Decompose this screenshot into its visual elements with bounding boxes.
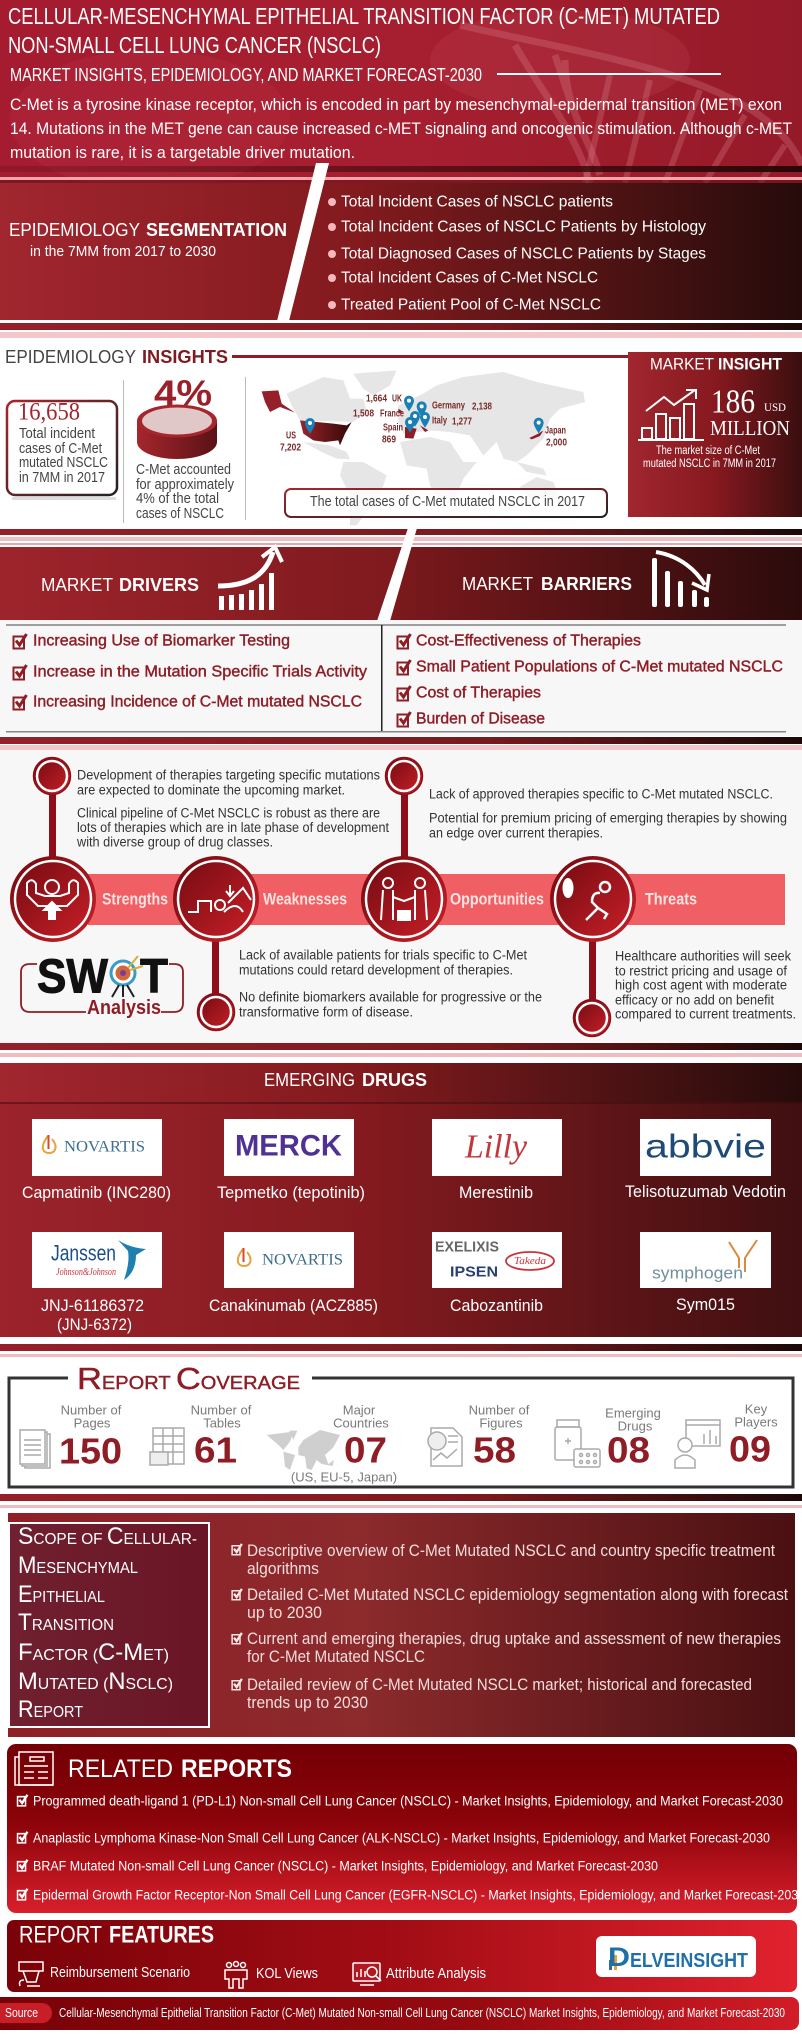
heading: report features: FEATURES: [109, 1922, 214, 1948]
stat: pages: Number of: [61, 1402, 122, 1418]
world map with case counts: France: [380, 408, 404, 420]
scope list: [232, 1542, 788, 1712]
icon: rising bars: [218, 547, 282, 610]
stat: figures: Number of: [469, 1402, 530, 1418]
stat: major countries: [267, 1402, 397, 1484]
segmentation list: Total Incident Cases of NSCLC Patients by Histology: [341, 218, 706, 236]
drug: Merestinib: Lilly: [464, 1128, 528, 1166]
panel: market drivers: [0, 547, 400, 620]
stat: figures: Figures: [479, 1416, 523, 1430]
stat: 4% cylinder: 4%: [154, 372, 212, 414]
heading: related reports: REPORTS: [181, 1755, 292, 1783]
threats node: Threats: [645, 890, 697, 908]
stat: tables: Number of: [191, 1402, 252, 1418]
feature: reimbursement scenario: [19, 1962, 190, 1986]
panel: scope of report: [8, 1513, 795, 1737]
heading: report coverage: REPORT COVERAGE: [77, 1361, 300, 1396]
weaknesses text: mutations could retard development of therapies.: [239, 962, 513, 978]
related reports list: [18, 1794, 802, 1902]
stat card: 16,658: cases of C-Met: [19, 441, 102, 457]
barriers list: Cost-Effectiveness of Therapies: [416, 632, 641, 650]
icon: growth chart: [638, 390, 704, 440]
strengths text: are expected to dominate the upcoming market.: [77, 782, 345, 798]
heading: epidemiology segmentation: EPIDEMIOLOGY: [9, 220, 140, 240]
title: NON-SMALL CELL LUNG CANCER (NSCLC): [8, 32, 381, 58]
stat: tables: Tables: [203, 1416, 241, 1430]
logo: DelveInsight: D: [608, 1942, 630, 1972]
strengths text: lots of therapies which are in late phase of development: [77, 820, 389, 835]
intro text block: [10, 96, 792, 162]
stat: major countries: 07: [344, 1430, 387, 1470]
weaknesses node: Weaknesses: [263, 890, 347, 908]
stat: key players: [675, 1402, 778, 1470]
drug: Cabozantinib: Cabozantinib: [450, 1297, 543, 1315]
opportunities text: Potential for premium pricing of emerging therapies by showing: [429, 810, 787, 826]
drug: Capmatinib: Capmatinib (INC280): [22, 1184, 171, 1202]
panel: market drivers: DRIVERS: [119, 575, 199, 595]
strengths node: Strengths: [102, 890, 168, 908]
strengths text: Development of therapies targeting specific mutations: [77, 768, 380, 782]
intro text block: mutation is rare, it is a targetable driver mutation.: [10, 144, 355, 162]
heading: emerging drugs: EMERGING: [264, 1070, 355, 1090]
feature: attribute analysis: [353, 1963, 486, 1985]
stat: key players: Players: [734, 1414, 778, 1430]
segmentation list: [328, 194, 706, 314]
SWOT analysis logo: T: [140, 950, 168, 1004]
panel: epidemiology insights: [5, 347, 632, 525]
world map with case counts: 1,664: [366, 394, 387, 404]
stat card: 16,658: 16,658: [18, 398, 80, 426]
scope list: up to 2030: [247, 1604, 322, 1622]
subtitle: MARKET INSIGHTS, EPIDEMIOLOGY, AND MARKET FORECAST-2030: [10, 65, 482, 85]
stat: major countries: Major: [343, 1402, 376, 1418]
scope list: Detailed review of C-Met Mutated NSCLC market; historical and forecasted: [247, 1676, 752, 1694]
drug: Tepmetko: [217, 1119, 365, 1202]
feature: attribute analysis: Attribute Analysis: [386, 1966, 486, 1982]
panel: market drivers: MARKET: [41, 575, 113, 595]
stat: pages: [20, 1402, 122, 1472]
drug: JNJ-61186372: JNJ-61186372: [41, 1297, 144, 1315]
segmentation list: Total Incident Cases of NSCLC patients: [341, 194, 613, 210]
drug: Cabozantinib: IPSEN: [450, 1264, 498, 1280]
drug: Cabozantinib: [432, 1232, 562, 1315]
world map with case counts: Italy: [432, 416, 447, 426]
segmentation list: Total Diagnosed Cases of NSCLC Patients by Stages: [341, 246, 706, 262]
panel: market insight: MILLION: [710, 416, 790, 440]
heading: emerging drugs: DRUGS: [362, 1070, 427, 1090]
drug: Canakinumab: NOVARTIS: [262, 1252, 343, 1268]
scope list: algorithms: [247, 1560, 319, 1578]
strengths text: with diverse group of drug classes.: [76, 834, 273, 850]
stat: pages: Pages: [74, 1416, 111, 1430]
threats node: [550, 856, 697, 942]
drug: Telisotuzumab Vedotin: [625, 1119, 786, 1201]
world map with case counts: UK: [392, 394, 403, 404]
world map with case counts: Germany: [432, 400, 465, 412]
drug: Merestinib: Merestinib: [459, 1184, 533, 1202]
world map with case counts: Spain: [383, 422, 403, 434]
drivers list: Increase in the Mutation Specific Trials Activity: [33, 664, 367, 680]
opportunities text: an edge over current therapies.: [429, 826, 603, 840]
stat: 4% cylinder: 4% of the total: [136, 491, 219, 507]
scope list: Descriptive overview of C-Met Mutated NSCLC and country specific treatment: [247, 1542, 775, 1560]
strengths text: [76, 768, 389, 850]
heading: emerging drugs: [264, 1070, 427, 1090]
logo: DelveInsight: [596, 1936, 756, 1977]
drug: Tepmetko: MERCK: [235, 1130, 342, 1162]
stat: emerging drugs: Drugs: [618, 1418, 653, 1434]
drug: Canakinumab: Canakinumab (ACZ885): [209, 1297, 378, 1315]
stat: major countries: (US, EU-5, Japan): [291, 1470, 397, 1484]
stat: 4% cylinder: cases of NSCLC: [136, 506, 224, 522]
icon: report document: [15, 1752, 53, 1785]
drug: JNJ-61186372: (JNJ-6372): [57, 1316, 132, 1334]
scope heading box: TRANSITION: [18, 1609, 114, 1636]
stat: 4% cylinder: for approximately: [136, 477, 235, 493]
drug: Sym015: [640, 1232, 771, 1314]
feature: reimbursement scenario: Reimbursement Scenario: [50, 1965, 190, 1981]
panel: report features: [7, 1920, 797, 1992]
drug: Sym015: symphogen: [652, 1264, 743, 1282]
world map with case counts: Japan: [545, 426, 566, 436]
feature: KOL views: [225, 1962, 318, 1988]
drug: JNJ-61186372: Janssen: [51, 1240, 116, 1266]
panel: market insight: The market size of C-Met: [656, 445, 761, 457]
strengths node: [10, 856, 168, 942]
segmentation list: Total Incident Cases of C-Met NSCLC: [341, 270, 598, 286]
weaknesses text: Lack of available patients for trials specific to C-Met: [239, 948, 527, 962]
panel: market barriers: MARKET: [462, 574, 533, 594]
drug: Telisotuzumab Vedotin: abbvie: [645, 1128, 766, 1164]
world map with case counts: 2,138: [472, 402, 492, 412]
heading: related reports: [68, 1755, 292, 1783]
weaknesses node: [173, 856, 347, 942]
stat: emerging drugs: 08: [607, 1430, 650, 1470]
drivers list: Increasing Incidence of C-Met mutated NSCLC: [33, 694, 362, 710]
related reports list: BRAF Mutated Non-small Cell Lung Cancer (NSCLC) - Market Insights, Epidemiology, and Market Forecast-2030: [33, 1858, 658, 1874]
panel: epidemiology segmentation: [0, 183, 802, 320]
scope heading box: MESENCHYMAL: [18, 1552, 138, 1579]
opportunities text: [429, 786, 787, 840]
world map with case counts: 2,000: [546, 438, 567, 448]
stat card: 16,658: in 7MM in 2017: [19, 470, 105, 486]
stat: major countries: Countries: [333, 1416, 389, 1430]
drug: Capmatinib: [22, 1119, 171, 1202]
stat card: 16,658: [7, 398, 117, 500]
weaknesses text: [239, 948, 542, 1020]
swot bar: [88, 874, 785, 925]
panel: report coverage: [9, 1361, 793, 1487]
stat: emerging drugs: [555, 1406, 661, 1470]
world map with case counts: 1,508: [353, 408, 374, 420]
stat: emerging drugs: Emerging: [605, 1406, 661, 1420]
drug: Tepmetko: Tepmetko (tepotinib): [217, 1184, 365, 1202]
panel: market insight: 186: [711, 384, 755, 420]
heading: epidemiology segmentation: [9, 220, 287, 260]
feature: KOL views: KOL Views: [256, 1966, 318, 1982]
opportunities text: Lack of approved therapies specific to C-Met mutated NSCLC.: [429, 786, 773, 802]
heading: epidemiology insights: EPIDEMIOLOGY: [5, 347, 136, 367]
panel: market insight: INSIGHT: [718, 354, 783, 374]
scope heading box: [9, 1523, 209, 1727]
panel: market barriers: BARRIERS: [541, 574, 632, 594]
scope heading box: FACTOR (C-MET): [18, 1639, 169, 1666]
drug: Sym015: Sym015: [676, 1296, 735, 1314]
icon: falling bars: [652, 552, 709, 607]
barriers list: Cost of Therapies: [416, 684, 541, 702]
threats text: Healthcare authorities will seek: [615, 948, 791, 964]
drug: Canakinumab: [209, 1232, 378, 1315]
heading: report features: [19, 1922, 214, 1948]
source bar: Source: [5, 2006, 38, 2020]
source bar: [0, 1997, 799, 2030]
scope heading box: SCOPE OF CELLULAR-: [18, 1523, 197, 1550]
scope heading box: REPORT: [18, 1696, 83, 1723]
stat: figures: 58: [473, 1430, 516, 1470]
drug: JNJ-61186372: [32, 1232, 162, 1334]
weaknesses text: transformative form of disease.: [239, 1004, 413, 1020]
stat: 4% cylinder: [136, 372, 235, 522]
panel: market barriers: [400, 547, 802, 620]
callout: total cases: [285, 489, 607, 517]
stat: 4% cylinder: C-Met accounted: [136, 462, 231, 478]
world map with case counts: 869: [382, 434, 396, 446]
header panel background: [0, 0, 802, 190]
panel: market insight: MARKET: [650, 354, 714, 374]
drivers list: Increasing Use of Biomarker Testing: [33, 632, 290, 650]
callout: total cases: The total cases of C-Met mutated NSCLC in 2017: [310, 494, 585, 510]
scope heading box: EPITHELIAL: [18, 1581, 105, 1608]
segmentation list: Treated Patient Pool of C-Met NSCLC: [341, 296, 601, 314]
panel: emerging drugs: [0, 1063, 802, 1337]
drug: Cabozantinib: EXELIXIS: [435, 1238, 499, 1256]
panel: market insight: USD: [764, 402, 786, 414]
stat: figures: [428, 1402, 530, 1470]
stat: key players: 09: [729, 1428, 771, 1470]
intro text block: C-Met is a tyrosine kinase receptor, which is encoded in part by mesenchymal-epidermal transition (MET) exon: [10, 96, 782, 114]
stat: tables: [150, 1402, 252, 1470]
stat: tables: 61: [194, 1430, 237, 1470]
scope heading box: MUTATED (NSCLC): [18, 1668, 173, 1695]
stat: pages: 150: [59, 1430, 122, 1472]
drug: Cabozantinib: Takeda: [514, 1255, 547, 1267]
world map with case counts: 7,202: [280, 442, 301, 454]
drug: JNJ-61186372: Johnson&Johnson: [56, 1266, 116, 1278]
heading: epidemiology segmentation: in the 7MM from 2017 to 2030: [30, 244, 216, 260]
stat: key players: Key: [745, 1402, 768, 1416]
barriers list: [398, 632, 783, 728]
drug: Merestinib: [432, 1119, 562, 1202]
threats text: compared to current treatments.: [615, 1006, 796, 1022]
heading: epidemiology segmentation: SEGMENTATION: [146, 220, 287, 240]
scope list: for C-Met Mutated NSCLC: [247, 1648, 425, 1666]
threats text: to restrict pricing and usage of: [615, 964, 787, 978]
barriers list: Small Patient Populations of C-Met mutated NSCLC: [416, 658, 783, 676]
SWOT analysis logo: SW: [37, 950, 109, 1004]
stat card: 16,658: Total incident: [19, 426, 95, 442]
heading: epidemiology insights: INSIGHTS: [142, 347, 228, 367]
title: [8, 3, 720, 58]
barriers list: Burden of Disease: [416, 710, 545, 728]
world map with case counts: US: [286, 430, 296, 442]
panel: related reports: [7, 1744, 802, 1913]
heading: report features: REPORT: [19, 1922, 102, 1948]
heading: related reports: RELATED: [68, 1755, 173, 1783]
opportunities node: [361, 856, 544, 942]
strengths text: Clinical pipeline of C-Met NSCLC is robust as there are: [77, 806, 380, 820]
panel: market insight: [628, 352, 802, 517]
threats text: high cost agent with moderate: [615, 978, 787, 992]
stat card: 16,658: mutated NSCLC: [19, 455, 108, 471]
stems and nodes: [34, 758, 610, 1036]
opportunities node: Opportunities: [450, 890, 544, 908]
drug: Capmatinib: NOVARTIS: [64, 1138, 145, 1156]
SWOT analysis logo: [21, 950, 183, 1019]
world map with case counts: [262, 370, 585, 525]
threats text: efficacy or no add on benefit: [615, 992, 774, 1008]
panel: drivers and barriers lists: [0, 620, 802, 736]
panel: SWOT analysis: [0, 750, 802, 1043]
drug: Telisotuzumab Vedotin: Telisotuzumab Vedotin: [625, 1183, 786, 1201]
world map with case counts: 1,277: [452, 416, 472, 428]
drivers list: [14, 632, 367, 710]
heading: epidemiology insights: [5, 347, 632, 367]
threats text: [615, 948, 796, 1022]
scope list: trends up to 2030: [247, 1694, 368, 1712]
logo: DelveInsight: ELVEINSIGHT: [630, 1950, 748, 1972]
weaknesses text: No definite biomarkers available for progressive or the: [239, 990, 542, 1004]
SWOT analysis logo: Analysis: [87, 997, 161, 1019]
